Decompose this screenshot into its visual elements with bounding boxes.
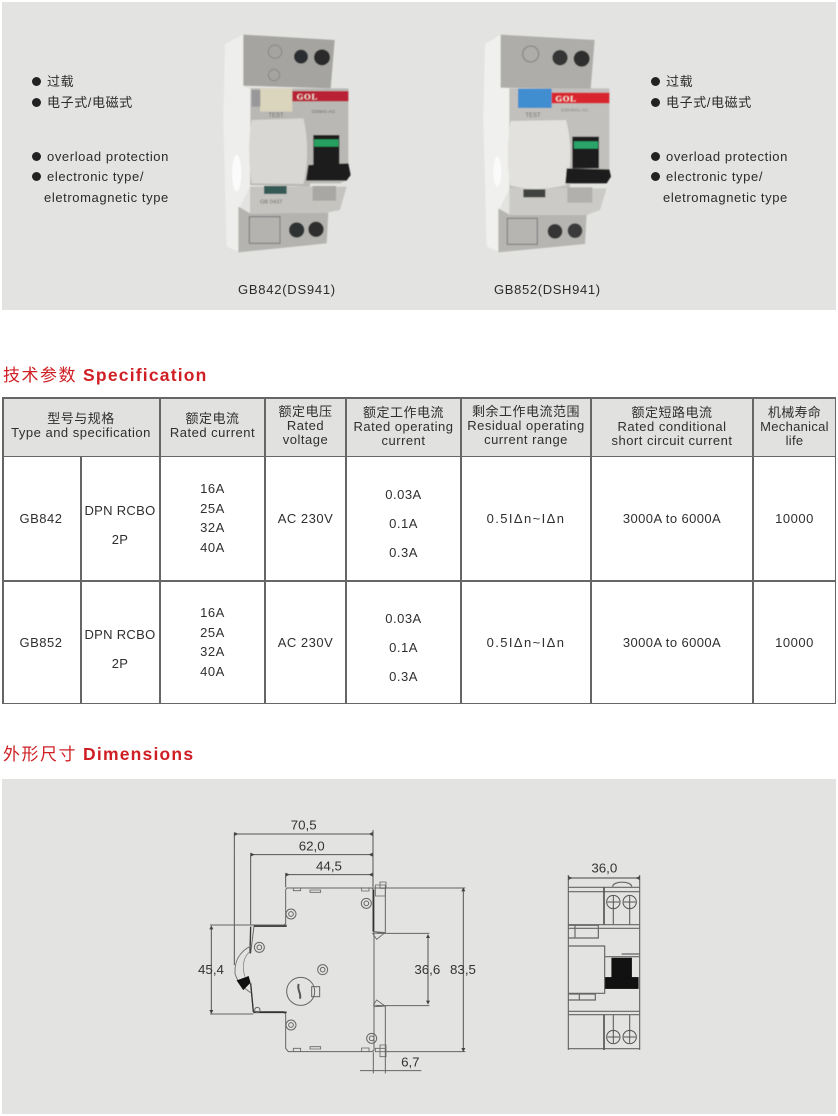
table row: GB842: 25A: [200, 500, 225, 516]
table row: GB842: 3000A to 6000A: [623, 511, 721, 526]
table row: GB852: AC 230V: [278, 635, 333, 650]
icon: breaker GB852: TEST: [525, 113, 541, 119]
table header row: Type and specification: [11, 425, 151, 440]
bullet list: left: electronic type/: [47, 169, 144, 184]
table header row: 额定短路电流: [631, 405, 712, 420]
table row: GB842: 2P: [112, 532, 128, 547]
table header row: Rated conditional: [618, 419, 726, 434]
caption: GB842: GB842(DS941): [238, 282, 336, 297]
table row: GB852: 25A: [200, 624, 225, 640]
table row: GB842: [20, 481, 814, 560]
bullet list: left: 过载: [47, 74, 74, 89]
heading: Specification: 技术参数 Specification: [3, 365, 208, 385]
icon: breaker GB852: [483, 35, 611, 252]
table header row: Residual operating: [467, 418, 585, 433]
drawing: side view with dimensions: 83,5: [450, 962, 476, 977]
table header row: [11, 404, 829, 448]
table row: GB842: 32A: [200, 520, 225, 535]
bullet list: right: [651, 74, 788, 205]
icon: breaker GB842: TEST: [268, 113, 284, 119]
table header row: current range: [484, 432, 568, 447]
table row: GB842: 0.3A: [389, 545, 418, 560]
icon: breaker GB842: DS941-AC: [312, 109, 336, 115]
icon: breaker GB842: GOL: [297, 91, 318, 101]
bullet list: right: overload protection: [666, 149, 788, 164]
bullet list: right: eletromagnetic type: [663, 190, 788, 205]
table row: GB842: 10000: [775, 511, 814, 526]
table row: GB842: AC 230V: [278, 511, 333, 526]
table header row: short circuit current: [611, 433, 733, 448]
icon: breaker GB852: DSH941-AC: [561, 108, 589, 114]
table header row: 型号与规格: [47, 411, 115, 426]
table row: GB842: DPN RCBO: [84, 503, 156, 518]
table row: GB842: 0.1A: [389, 516, 418, 531]
drawing: side view with dimensions: 62,0: [299, 838, 325, 853]
table header row: 额定电压: [278, 404, 332, 419]
drawing: side view with dimensions: [198, 817, 476, 1073]
panel: product photos: [2, 2, 836, 310]
drawing: side view with dimensions: 36,6: [414, 962, 440, 977]
table row: GB852: 0.1A: [389, 640, 418, 655]
table row: GB852: DPN RCBO: [84, 627, 156, 642]
table row: GB852: [20, 605, 814, 684]
table: specification: [2, 397, 836, 704]
bullet list: right: 电子式/电磁式: [666, 95, 752, 110]
table header row: 机械寿命: [768, 405, 821, 420]
table row: GB852: 16A: [200, 605, 225, 620]
drawing: side view with dimensions: 70,5: [291, 817, 317, 832]
table header row: 剩余工作电流范围: [472, 404, 580, 419]
drawing: front view with dimension: 36,0: [591, 861, 617, 876]
table row: GB852: 0.5IΔn~IΔn: [487, 635, 565, 650]
table row: GB842: 16A: [200, 481, 225, 496]
table row: GB842: 40A: [200, 540, 225, 554]
table row: GB852: 3000A to 6000A: [623, 635, 721, 650]
table header row: 额定工作电流: [363, 405, 444, 420]
table row: GB842: 0.5IΔn~IΔn: [487, 511, 565, 526]
table row: GB842: 0.03A: [385, 487, 422, 502]
icon: breaker GB842: GB 0437: [260, 199, 282, 205]
screws: [254, 898, 377, 1043]
table header row: voltage: [283, 432, 328, 447]
bullet list: left: eletromagnetic type: [44, 190, 169, 205]
panel: dimensions: [2, 779, 836, 1114]
table header row: 额定电流: [185, 411, 240, 426]
table row: GB852: GB852: [20, 635, 62, 650]
table header row: Rated operating: [353, 419, 454, 434]
table row: GB852: 0.03A: [385, 611, 422, 626]
handle: [235, 946, 251, 993]
body outline: [251, 888, 385, 1052]
table header row: life: [786, 433, 803, 448]
bullet list: left: 电子式/电磁式: [47, 95, 133, 110]
drawing: side view with dimensions: 6,7: [401, 1054, 420, 1069]
table header row: Rated: [287, 418, 324, 433]
drawing: side view with dimensions: 45,4: [198, 962, 225, 977]
table row: GB852: 0.3A: [389, 669, 418, 684]
bullet list: right: electronic type/: [666, 169, 763, 184]
drawing: front view with dimension: [568, 861, 640, 1050]
dial: [287, 977, 315, 1005]
bullet list: left: overload protection: [47, 149, 169, 164]
bullet list: right: 过载: [666, 74, 693, 89]
heading: Dimensions: 外形尺寸 Dimensions: [3, 744, 194, 764]
table header row: Mechanical: [760, 419, 829, 434]
table row: GB852: 2P: [112, 656, 128, 671]
bullet list: left: [32, 74, 169, 205]
table row: GB852: 40A: [200, 664, 225, 678]
table header row: current: [382, 433, 425, 448]
table row: GB852: 32A: [200, 644, 225, 659]
drawing: side view with dimensions: 44,5: [316, 858, 342, 873]
icon: breaker GB852: GOL: [555, 94, 577, 104]
table row: GB842: GB842: [20, 511, 62, 526]
icon: breaker GB842: [223, 35, 351, 252]
caption: GB852: GB852(DSH941): [494, 282, 601, 297]
table row: GB852: 10000: [775, 635, 814, 650]
table header row: Rated current: [170, 425, 255, 440]
